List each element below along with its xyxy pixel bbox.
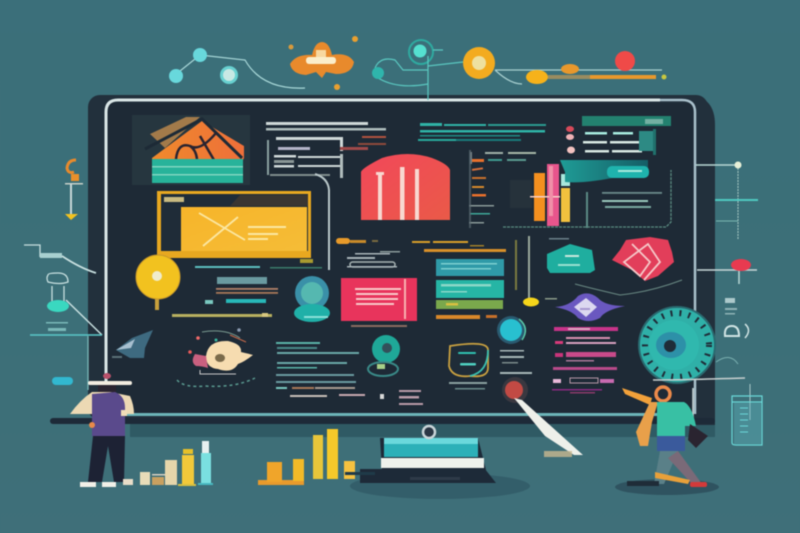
chart: central bars <box>258 429 355 485</box>
small list under connector <box>347 253 397 268</box>
icon: red badge <box>612 237 674 281</box>
icon: yellow pin <box>136 255 180 310</box>
icon: beaker <box>732 396 762 445</box>
text block: yellow lines <box>350 236 530 300</box>
connector line <box>315 174 329 270</box>
text block: magenta list <box>552 327 618 394</box>
orange caption <box>336 238 378 244</box>
connector lines right <box>653 165 758 420</box>
panel: teal list cards <box>436 259 504 319</box>
icon: connector node <box>734 162 742 168</box>
icon: rounded outline card <box>449 344 488 376</box>
icon: left orange node <box>65 160 83 220</box>
panel: yellow window <box>157 191 313 263</box>
icon: laptop <box>345 426 530 499</box>
panel: green header list <box>582 116 671 155</box>
text block: small right lines <box>449 350 532 390</box>
icon: orange cluster <box>288 36 358 90</box>
bar chart panel <box>469 150 671 228</box>
icon: stylus and red button <box>502 377 583 457</box>
chart: left bars <box>123 441 213 486</box>
monitor <box>50 95 715 437</box>
icon: cyan ring <box>497 316 525 344</box>
text block: middle left lines <box>172 266 322 317</box>
icon: left flask <box>24 245 102 390</box>
figure: left person <box>70 373 134 487</box>
icon: yellow dot <box>523 298 539 306</box>
icon: purple diamond <box>545 293 625 321</box>
text block: upper list <box>266 122 386 178</box>
curved line <box>575 280 682 295</box>
text block: top teal lines <box>418 123 546 141</box>
icon: teal line nodes <box>372 40 463 100</box>
panel: red arch chart <box>361 154 450 220</box>
icon: central ring <box>368 335 400 376</box>
icon: top right timeline <box>463 47 666 84</box>
icon: central blob diagram <box>177 328 255 386</box>
icon: status dots <box>566 126 575 154</box>
panel: red note card <box>341 278 417 327</box>
icon: red pin <box>731 259 751 271</box>
icon: teal rings <box>294 276 330 322</box>
icon: pencil shape <box>112 330 153 358</box>
icon: top tree nodes <box>169 48 305 88</box>
icon: teal tag <box>547 238 595 273</box>
icon: teal gear <box>639 307 715 383</box>
right side icons <box>716 298 750 420</box>
figure: right person <box>615 387 719 495</box>
panel: house icon <box>132 115 250 185</box>
text block: central lines <box>276 342 423 405</box>
